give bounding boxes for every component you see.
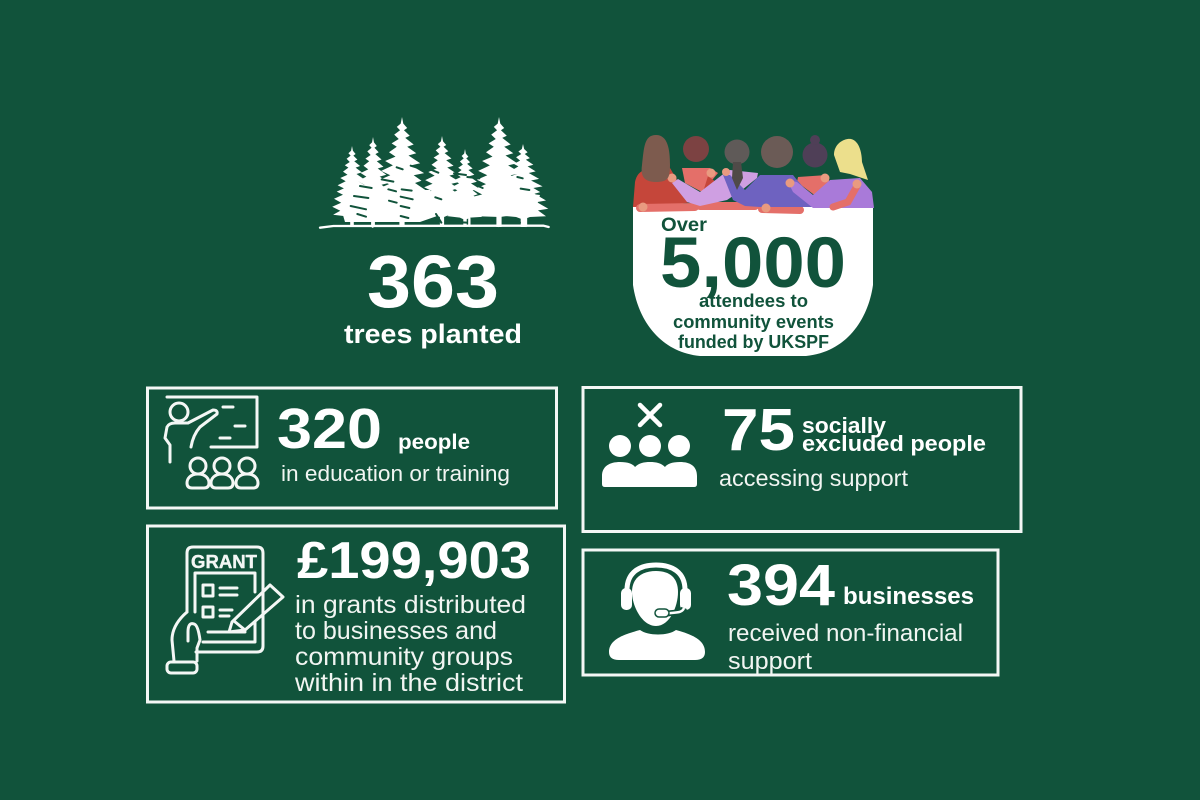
text: businesses: businesses xyxy=(843,583,974,610)
number: 5,000: 5,000 xyxy=(660,224,846,303)
number: 75: 75 xyxy=(722,397,795,463)
icon: headset support agent xyxy=(609,565,705,660)
text: socially excluded people xyxy=(802,413,986,456)
text: socially excluded people: socially xyxy=(802,413,887,438)
icon: teacher and pupils xyxy=(165,397,258,488)
panel: education or training xyxy=(148,388,556,508)
text: socially excluded people: excluded people xyxy=(802,431,986,456)
number: 394: 394 xyxy=(727,553,835,618)
icon: excluded group xyxy=(602,405,697,487)
illustration: group of people xyxy=(633,135,874,212)
icon: grant form xyxy=(167,547,283,673)
stat: 363 trees planted xyxy=(344,240,522,349)
text: grants description: in grants distributed xyxy=(295,591,526,619)
icon: forest of trees xyxy=(320,117,549,228)
badge background xyxy=(633,207,873,356)
text: attendees: funded by UKSPF xyxy=(678,331,829,352)
stat: 363 trees planted: 363 xyxy=(367,240,499,323)
panel border xyxy=(148,526,564,702)
text: grants description xyxy=(294,591,526,697)
panel border xyxy=(583,388,1021,532)
text: grants description: within in the district xyxy=(294,669,523,697)
panel: grants xyxy=(148,526,564,702)
text: attendees xyxy=(673,290,834,352)
panel border xyxy=(583,550,998,675)
number: 320: 320 xyxy=(277,397,382,461)
text: over: Over xyxy=(661,215,708,236)
text: received non-financial support xyxy=(728,620,963,675)
text: grants description: community groups xyxy=(295,643,513,671)
text: received non-financial support: received non-financial xyxy=(728,620,963,647)
text: accessing support: accessing support xyxy=(719,465,909,491)
stat: 363 trees planted: trees planted xyxy=(344,319,522,349)
panel: community events badge xyxy=(633,135,874,356)
text: received non-financial support: support xyxy=(728,648,812,675)
text: attendees: attendees to xyxy=(699,290,808,311)
panel: businesses xyxy=(583,550,998,675)
text: people: people xyxy=(398,431,470,454)
text: attendees: community events xyxy=(673,311,834,332)
text: in education or training: in education or training xyxy=(281,461,510,486)
number: £199,903: £199,903 xyxy=(297,532,531,590)
panel: socially excluded people xyxy=(583,388,1021,532)
panel border xyxy=(148,388,556,508)
icon: grant form: GRANT xyxy=(191,552,257,572)
text: grants description: to businesses and xyxy=(295,617,497,645)
